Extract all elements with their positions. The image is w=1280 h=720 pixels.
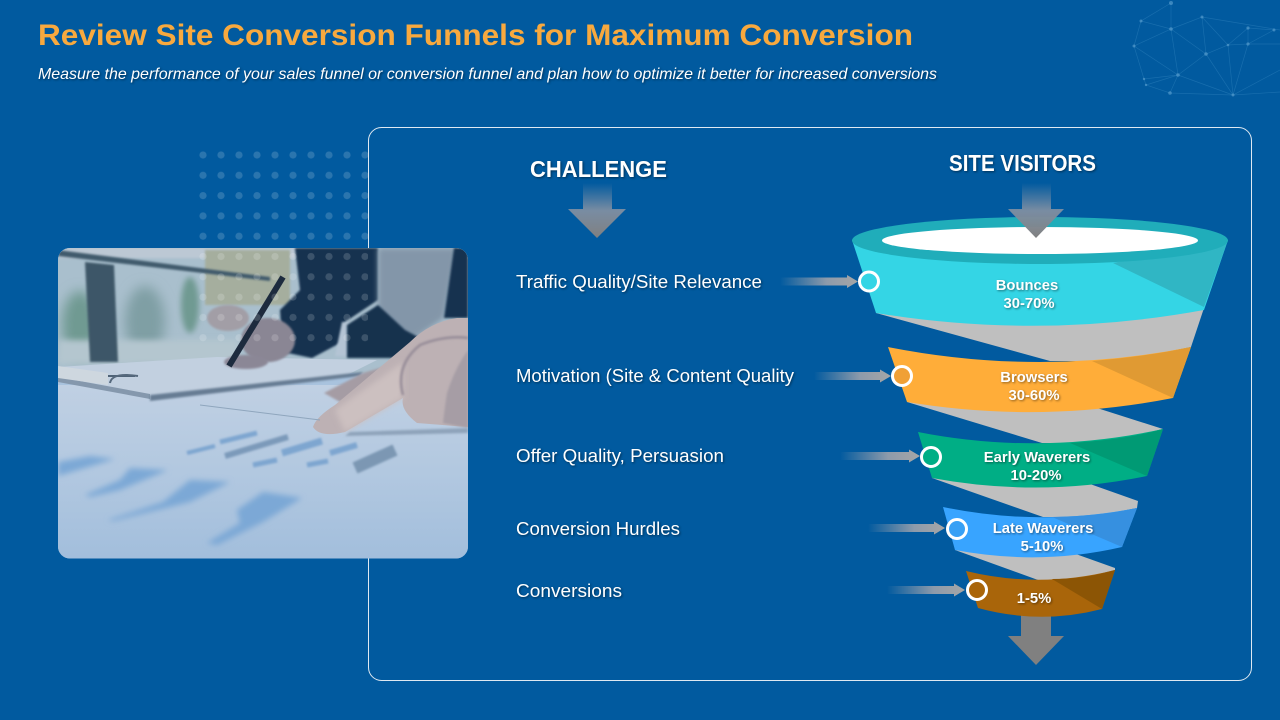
band: conversions: [966, 570, 1115, 617]
challenge label: conversions: Conversions: [516, 581, 622, 601]
challenge label: motivation: Motivation (Site & Content Quality: [516, 366, 794, 386]
title: Review Site Conversion Funnels for Maximum Conversion: [38, 19, 913, 52]
heading: challenge: CHALLENGE: [530, 156, 667, 182]
band: bounces: 30-70%: [1003, 296, 1055, 312]
subtitle: Measure the performance of your sales funnel or conversion funnel and plan how to optimize it better for increased conversions: [38, 66, 937, 83]
gray connector bands: [876, 308, 1204, 580]
exit arrow: [1008, 612, 1064, 665]
arrow: motivation to browsers: [814, 370, 891, 382]
band: late waverers: 5-10%: [1021, 539, 1063, 555]
band: early waverers: 10-20%: [1010, 468, 1062, 484]
challenge label: offer quality: Offer Quality, Persuasion: [516, 446, 724, 466]
dot grid decoration: [198, 150, 368, 344]
decorative network mesh: [1132, 1, 1280, 96]
heading: site visitors: SITE VISITORS: [949, 150, 1096, 176]
band: conversions: 1-5%: [1017, 591, 1051, 607]
arrow: traffic quality to bounces: [780, 275, 858, 288]
funnel: [852, 217, 1228, 665]
marker: late waverers: [948, 520, 966, 538]
band: browsers: 30-60%: [1008, 388, 1060, 404]
challenge label: conversion hurdles: Conversion Hurdles: [516, 519, 680, 539]
band: bounces: Bounces: [996, 278, 1058, 294]
challenge label: traffic quality: Traffic Quality/Site Relevance: [516, 272, 762, 292]
band: browsers: Browsers: [1000, 370, 1068, 386]
band: late waverers: [943, 507, 1137, 557]
band: late waverers: Late Waverers: [993, 521, 1093, 537]
band: early waverers: [918, 429, 1163, 488]
arrow: hurdles to late waverers: [868, 522, 945, 534]
arrow: offer quality to early waverers: [840, 450, 920, 462]
arrow: conversions to final band: [887, 584, 965, 596]
arrow: site visitors down: [1008, 183, 1064, 238]
marker: browsers: [892, 366, 912, 386]
marker: conversions: [968, 580, 986, 600]
arrow: challenge down: [568, 183, 626, 238]
marker: bounces: [860, 272, 878, 291]
band: browsers: [888, 347, 1191, 412]
band: bounces: [852, 217, 1228, 326]
band: early waverers: Early Waverers: [984, 450, 1090, 466]
panel: funnel outline: [368, 128, 1252, 680]
marker: early waverers: [922, 448, 940, 466]
photo: hands reviewing charts: [58, 248, 468, 559]
